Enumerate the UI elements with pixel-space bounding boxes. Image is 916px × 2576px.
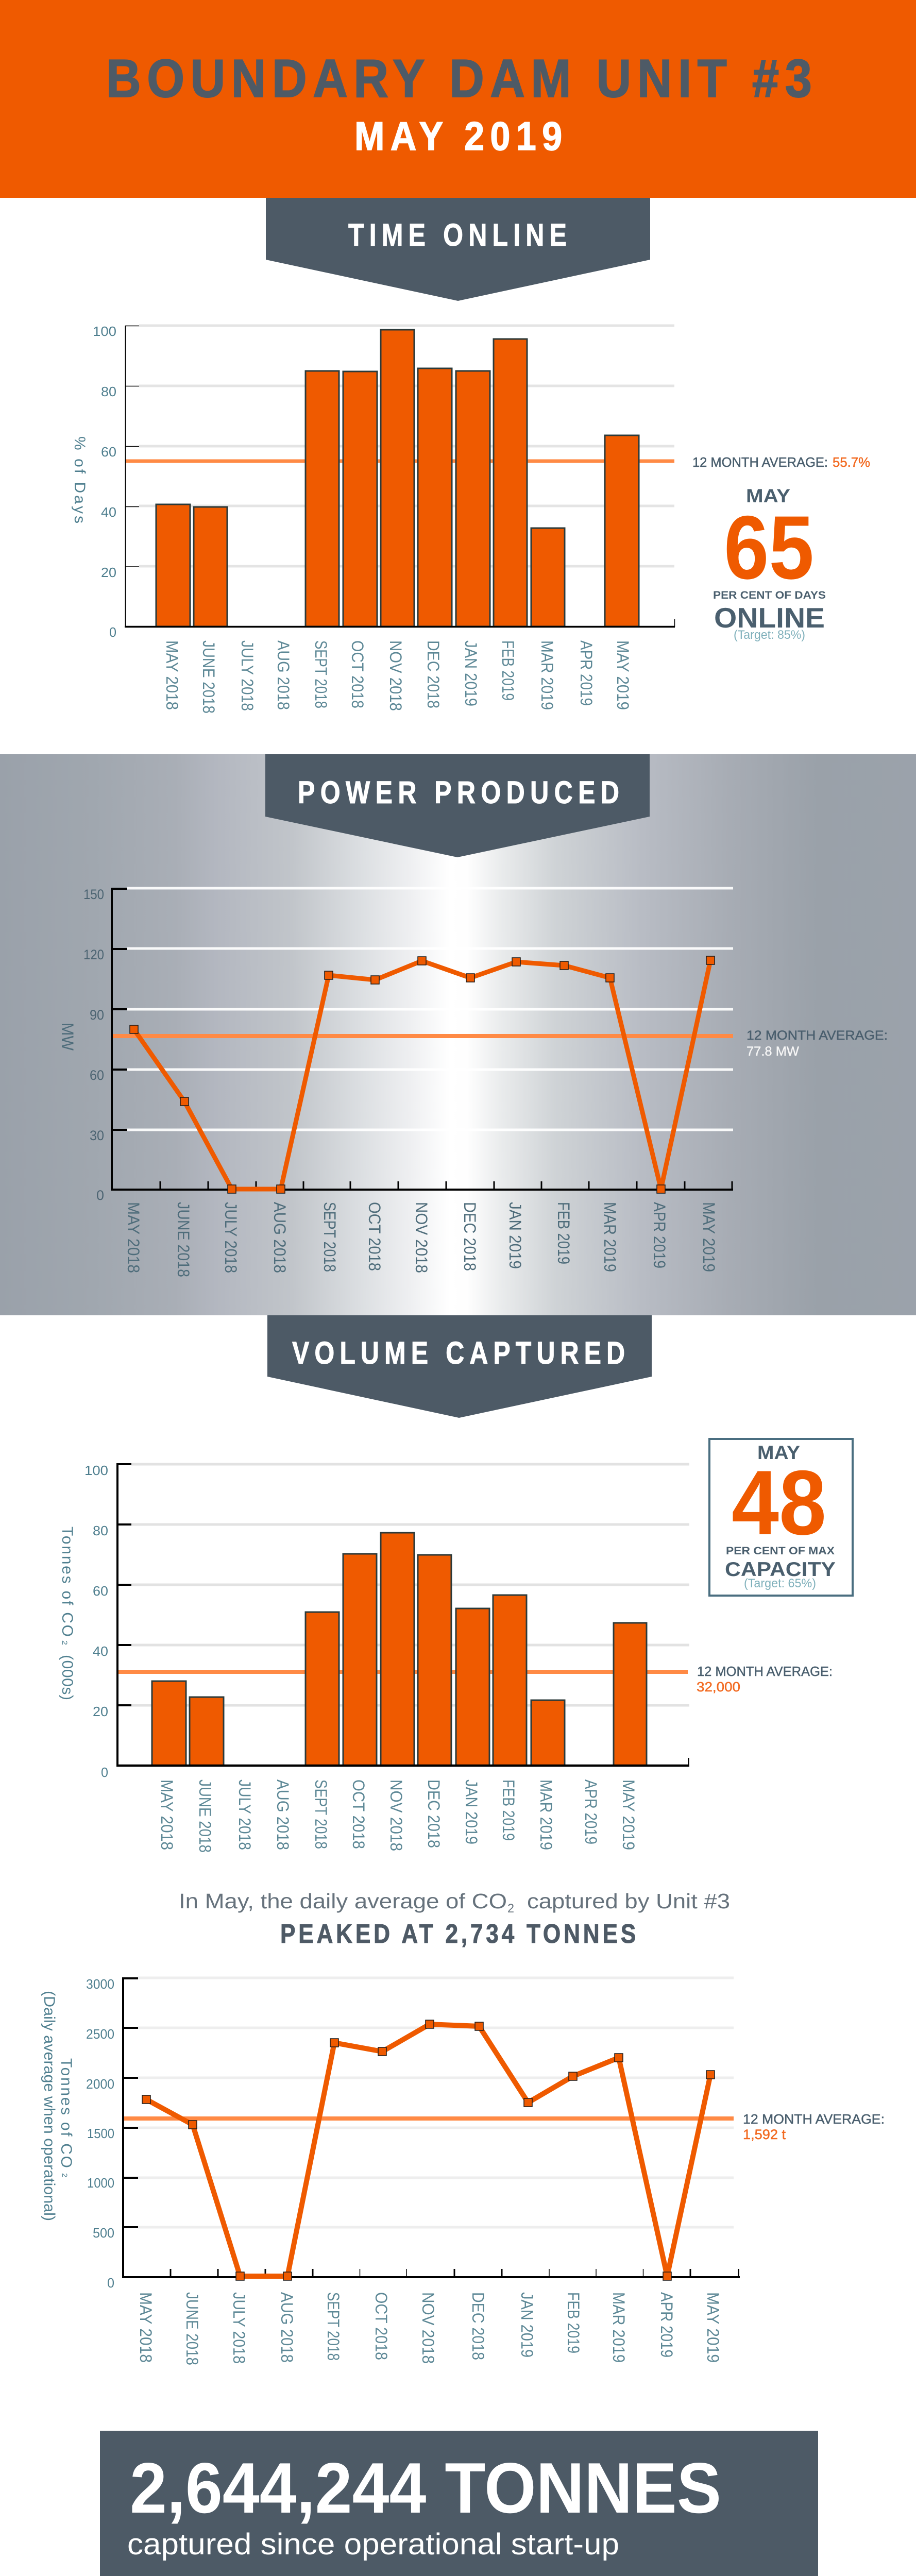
12 month average label: daily CO2 (743, 2111, 885, 2142)
line chart: daily average CO2: JULY 2018 (230, 2292, 248, 2364)
panel: power produced (0, 754, 916, 1315)
12 month average label: power (747, 1028, 888, 1059)
line chart: daily average CO2: OCT 2018 (372, 2292, 391, 2360)
bar chart: volume captured: SEPT 2018 (312, 1780, 330, 1849)
heading: daily average peak: In May, the daily average of CO (179, 1889, 507, 1913)
line chart: power produced: JUNE 2018 (174, 1202, 193, 1277)
line chart: daily average CO2: MAY 2018 (137, 2292, 155, 2363)
12 month average label: daily CO2: 1,592 t (743, 2127, 786, 2142)
bar chart: volume captured: FEB 2019 (499, 1780, 518, 1841)
bar chart: time online: OCT 2018 (348, 640, 367, 708)
bar chart: volume captured: 100 (84, 1463, 108, 1478)
banner: volume captured (267, 1315, 652, 1418)
line chart: power produced: FEB 2019 (554, 1202, 573, 1264)
total caption: captured since operational start-up (127, 2528, 619, 2561)
line chart: power produced: MAY 2018 (124, 1202, 143, 1273)
12 month average label: volume (697, 1664, 833, 1694)
header band with title (0, 0, 916, 198)
line chart: daily average CO2: 1500 (87, 2126, 114, 2141)
banner: power produced: POWER PRODUCED (298, 775, 619, 810)
bar chart: time online: JUNE 2018 (199, 640, 218, 714)
heading: daily average peak (179, 1889, 730, 1949)
bar chart: volume captured: JAN 2019 (462, 1780, 481, 1844)
heading: daily average peak: PEAKED AT 2,734 TONNES (280, 1919, 636, 1949)
line chart: daily average CO2: MAR 2019 (609, 2292, 628, 2363)
callout box: May 48 per cent of max capacity: CAPACITY (725, 1558, 836, 1581)
bar chart: volume captured: 80 (93, 1523, 108, 1538)
line chart: daily average CO2: AUG 2018 (278, 2292, 296, 2363)
heading: daily average peak: 2 (507, 1902, 514, 1916)
bar chart: volume captured: Tonnes of CO (59, 1527, 76, 1637)
line chart: daily average CO2: 2000 (86, 2076, 114, 2092)
bar chart: volume captured: 40 (93, 1643, 108, 1659)
bar chart: volume captured: AUG 2018 (274, 1780, 292, 1850)
bar chart: volume captured (59, 1463, 689, 1853)
callout box: May 48 per cent of max capacity: MAY (757, 1442, 800, 1463)
banner: power produced (265, 754, 650, 857)
bar chart: time online: SEPT 2018 (312, 640, 330, 708)
12 month average label: volume: 12 MONTH AVERAGE: (697, 1664, 833, 1679)
total figure: 2,644,244 TONNES (130, 2448, 721, 2528)
bar chart: volume captured: JUNE 2018 (196, 1780, 214, 1853)
callout: May 65 per cent online: PER CENT OF DAYS (713, 589, 826, 601)
line chart: daily average CO2: JAN 2019 (518, 2292, 536, 2358)
line chart: daily average CO2: 500 (93, 2225, 114, 2241)
line chart: power produced: JULY 2018 (222, 1202, 240, 1273)
line chart: daily average CO2: FEB 2019 (564, 2292, 583, 2353)
bar chart: time online: JULY 2018 (238, 640, 257, 711)
bar chart: volume captured: MAY 2018 (158, 1780, 176, 1850)
line chart: power produced: 120 (83, 947, 104, 962)
line chart: power produced: MW (58, 1023, 77, 1051)
bar chart: time online: MAY 2018 (163, 640, 181, 710)
bar chart: volume captured: 0 (101, 1765, 108, 1780)
12 month average label: power: 12 MONTH AVERAGE: (747, 1028, 888, 1043)
bar chart: volume captured: DEC 2018 (425, 1780, 443, 1848)
line chart: daily average CO2: (Daily average when operational) (41, 1991, 58, 2221)
bar chart: time online: 80 (101, 384, 116, 399)
12 month average label: daily CO2: 12 MONTH AVERAGE: (743, 2111, 885, 2127)
line chart: power produced: JAN 2019 (506, 1202, 524, 1269)
line chart: power produced: OCT 2018 (365, 1202, 384, 1271)
line chart: daily average CO2: 0 (107, 2275, 114, 2291)
callout box: May 48 per cent of max capacity: 48 (732, 1451, 826, 1554)
line chart: power produced: AUG 2018 (270, 1202, 289, 1273)
banner: time online: TIME ONLINE (348, 217, 567, 252)
bar chart: time online: % of Days (71, 436, 88, 523)
bar chart: volume captured: 60 (93, 1583, 108, 1599)
line chart: power produced: DEC 2018 (461, 1202, 479, 1271)
callout box: May 48 per cent of max capacity: (Target: 65%) (744, 1577, 816, 1590)
callout box: May 48 per cent of max capacity (709, 1439, 853, 1596)
callout: May 65 per cent online: ONLINE (714, 602, 825, 634)
bar chart: volume captured: MAY 2019 (619, 1780, 638, 1850)
bar chart: time online: MAR 2019 (538, 640, 556, 710)
bar chart: time online: JAN 2019 (462, 640, 480, 706)
line chart: daily average CO2: 1000 (87, 2175, 114, 2191)
line chart: power produced: MAR 2019 (601, 1202, 619, 1272)
title: BOUNDARY DAM UNIT #3 (106, 48, 812, 108)
12 month average label: volume: 32,000 (697, 1679, 740, 1694)
line chart: daily average CO2: 2 (61, 2173, 69, 2177)
bar chart: volume captured: OCT 2018 (349, 1780, 368, 1849)
bar chart: time online: 0 (109, 624, 116, 640)
12 month average label: power: 77.8 MW (747, 1044, 799, 1059)
12 month average label: time online: 12 MONTH AVERAGE: (692, 454, 828, 470)
line chart: power produced: 60 (90, 1067, 104, 1083)
line chart: daily average CO2 (41, 1976, 740, 2365)
bar chart: volume captured: NOV 2018 (387, 1780, 405, 1851)
callout: May 65 per cent online: 65 (724, 498, 814, 598)
line chart: power produced: 0 (96, 1188, 104, 1203)
bar chart: volume captured: 2 (61, 1640, 69, 1645)
callout: May 65 per cent online: MAY (746, 485, 790, 506)
callout: May 65 per cent online: (Target: 85%) (734, 628, 805, 642)
banner: time online (266, 198, 650, 301)
line chart: power produced: 30 (90, 1128, 104, 1143)
bar chart: time online: NOV 2018 (386, 640, 405, 711)
line chart: daily average CO2: 3000 (86, 1976, 114, 1992)
line chart: daily average CO2: SEPT 2018 (324, 2292, 343, 2361)
line chart: power produced: MAY 2019 (700, 1202, 718, 1272)
subtitle: date: MAY 2019 (354, 114, 562, 159)
bar chart: time online: MAY 2019 (614, 640, 632, 710)
bar chart: volume captured: JULY 2018 (235, 1780, 254, 1850)
bar chart: time online (71, 324, 675, 714)
line chart: daily average CO2: DEC 2018 (469, 2292, 487, 2360)
panel: total tonnes captured (100, 2431, 818, 2576)
line chart: daily average CO2: APR 2019 (657, 2292, 676, 2358)
12 month average label: time online: 55.7% (833, 454, 870, 470)
line chart: daily average CO2: NOV 2018 (419, 2292, 437, 2364)
line chart: power produced: NOV 2018 (412, 1202, 431, 1273)
callout box: May 48 per cent of max capacity: PER CENT OF MAX (726, 1545, 835, 1557)
bar chart: time online: FEB 2019 (499, 640, 517, 701)
bar chart: time online: 100 (93, 324, 116, 339)
line chart: daily average CO2: Tonnes of CO (58, 2058, 75, 2168)
bar chart: time online: APR 2019 (577, 640, 596, 706)
heading: daily average peak: captured by Unit #3 (527, 1889, 730, 1913)
bar chart: time online: AUG 2018 (274, 640, 293, 710)
line chart: daily average CO2: MAY 2019 (704, 2292, 722, 2363)
bar chart: volume captured: APR 2019 (582, 1780, 600, 1844)
line chart: daily average CO2: JUNE 2018 (183, 2292, 201, 2365)
bar chart: volume captured: 20 (93, 1704, 108, 1719)
line chart: power produced: 90 (90, 1007, 104, 1023)
bar chart: time online: DEC 2018 (424, 640, 443, 708)
callout: May 65 per cent online (713, 485, 826, 642)
line chart: power produced (58, 887, 733, 1277)
line chart: power produced: 150 (83, 887, 104, 902)
line chart: power produced: APR 2019 (650, 1202, 669, 1268)
bar chart: time online: 40 (101, 504, 116, 520)
line chart: power produced: SEPT 2018 (320, 1202, 339, 1272)
bar chart: volume captured: (000s) (59, 1655, 76, 1700)
bar chart: time online: 60 (101, 444, 116, 460)
line chart: daily average CO2: 2500 (86, 2026, 114, 2042)
bar chart: volume captured: MAR 2019 (537, 1780, 555, 1850)
bar chart: time online: 20 (101, 565, 116, 580)
banner: volume captured: VOLUME CAPTURED (292, 1335, 625, 1370)
